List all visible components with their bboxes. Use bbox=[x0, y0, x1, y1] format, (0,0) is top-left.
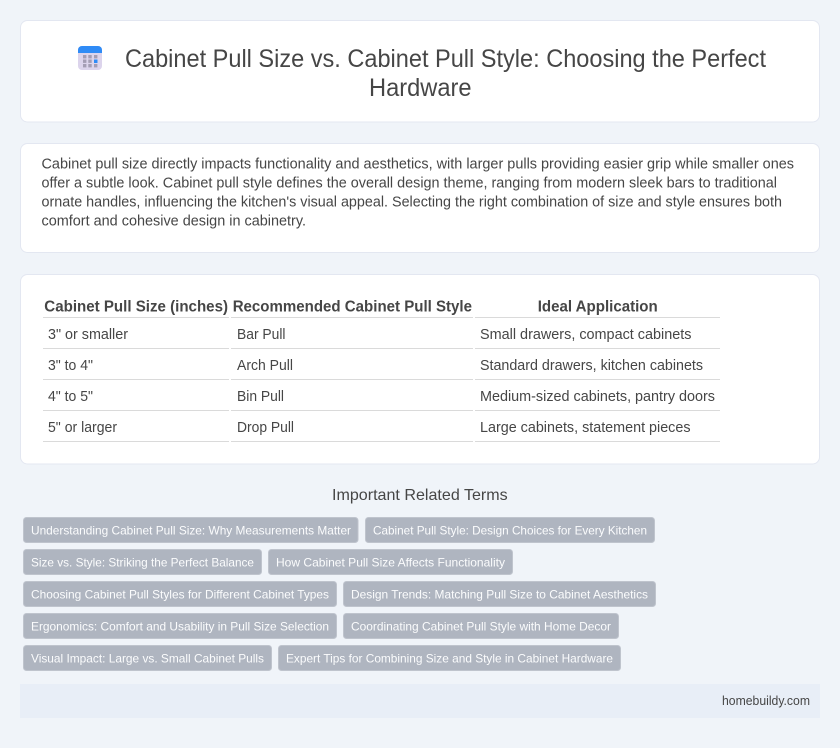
related term tags bbox=[24, 518, 656, 670]
intro paragraph: offer a subtle look. Cabinet pull style defines the overall design theme, ranging from modern sleek bars to traditional bbox=[42, 176, 777, 192]
panel: header bbox=[20, 20, 820, 122]
table row 2: Standard drawers, kitchen cabinets bbox=[480, 358, 703, 374]
table row 4: Drop Pull bbox=[237, 420, 294, 436]
tag: Design Trends: Matching Pull Size to Cabinet Aesthetics bbox=[351, 587, 648, 601]
table row 2: Arch Pull bbox=[237, 358, 293, 374]
intro paragraph: Cabinet pull size directly impacts functionality and aesthetics, with larger pulls providing easier grip while smaller ones bbox=[42, 156, 794, 172]
tag bbox=[268, 550, 512, 574]
table row 1: Bar Pull bbox=[237, 327, 286, 343]
footer source text: homebuildy.com bbox=[722, 693, 810, 708]
table row 4: Large cabinets, statement pieces bbox=[480, 420, 690, 436]
table row 2 bbox=[48, 358, 703, 374]
table row 3: Medium-sized cabinets, pantry doors bbox=[480, 389, 715, 405]
tag: Cabinet Pull Style: Design Choices for Every Kitchen bbox=[373, 523, 647, 537]
footer bbox=[20, 684, 820, 718]
title: Cabinet Pull Size vs. Cabinet Pull Style: Choosing the Perfect bbox=[125, 45, 766, 73]
tag bbox=[24, 614, 336, 638]
table header: Cabinet Pull Size (inches) bbox=[44, 298, 228, 316]
tag bbox=[24, 518, 358, 542]
table row 3: 4" to 5" bbox=[48, 389, 93, 405]
table row 1: Small drawers, compact cabinets bbox=[480, 327, 692, 343]
tag: How Cabinet Pull Size Affects Functionality bbox=[276, 555, 505, 569]
table row 3: Bin Pull bbox=[237, 389, 284, 405]
table row 2: 3" to 4" bbox=[48, 358, 93, 374]
table row 1 bbox=[48, 327, 692, 343]
tag bbox=[24, 550, 262, 574]
tag bbox=[278, 646, 620, 670]
heading: important related terms: Important Related Terms bbox=[332, 487, 508, 504]
tag: Visual Impact: Large vs. Small Cabinet Pulls bbox=[31, 651, 264, 665]
table header: Ideal Application bbox=[538, 298, 658, 316]
tag: Understanding Cabinet Pull Size: Why Measurements Matter bbox=[31, 523, 351, 537]
tag bbox=[24, 582, 336, 606]
title: Hardware bbox=[369, 74, 472, 102]
table row 4: 5" or larger bbox=[48, 420, 117, 436]
table row 3 bbox=[48, 389, 715, 405]
tag: Expert Tips for Combining Size and Style in Cabinet Hardware bbox=[286, 651, 613, 665]
panel: intro text bbox=[20, 144, 820, 252]
panel: table bbox=[20, 274, 820, 464]
table row 4 bbox=[48, 420, 690, 436]
table row 1: 3" or smaller bbox=[48, 327, 128, 343]
intro paragraph bbox=[42, 156, 794, 230]
tag bbox=[344, 614, 618, 638]
tag: Size vs. Style: Striking the Perfect Balance bbox=[31, 555, 254, 569]
intro paragraph: comfort and cohesive design in cabinetry. bbox=[42, 214, 306, 230]
tag: Coordinating Cabinet Pull Style with Home Decor bbox=[351, 619, 611, 633]
icon: calendar bbox=[78, 46, 102, 70]
table header bbox=[44, 298, 658, 316]
title bbox=[125, 45, 766, 102]
tag: Ergonomics: Comfort and Usability in Pull Size Selection bbox=[31, 619, 329, 633]
table header: Recommended Cabinet Pull Style bbox=[233, 298, 472, 316]
intro paragraph: ornate handles, influencing the kitchen's visual appeal. Selecting the right combination of size and style ensures both bbox=[42, 194, 782, 210]
tag bbox=[366, 518, 654, 542]
tag bbox=[344, 582, 656, 606]
tag: Choosing Cabinet Pull Styles for Different Cabinet Types bbox=[31, 587, 329, 601]
tag bbox=[24, 646, 272, 670]
